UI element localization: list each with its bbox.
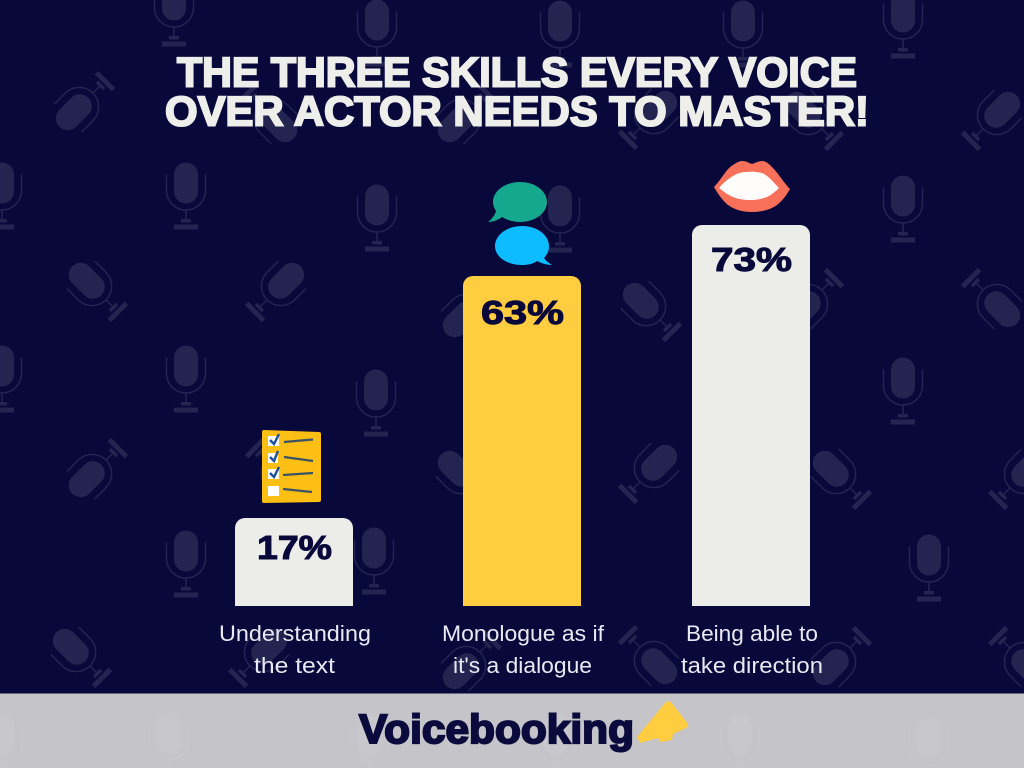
label: being able to take direction: Being able to [686, 621, 818, 646]
label: being able to take direction [681, 621, 823, 678]
value 17%: 17% [257, 529, 332, 566]
bar: understanding the text 17% [235, 518, 353, 606]
bar: monologue as if it's a dialogue 63% [463, 276, 581, 606]
label: understanding the text: Understanding [219, 621, 371, 646]
icon: speech bubbles [488, 182, 552, 265]
icon: lips [714, 161, 790, 212]
label: monologue as if it's a dialogue: it's a dialogue [453, 653, 592, 678]
label: monologue as if it's a dialogue [442, 621, 605, 678]
footer band [0, 694, 1024, 768]
logo: voicebooking wordmark: Voicebooking [359, 706, 634, 752]
label: monologue as if it's a dialogue: Monologue as if [442, 621, 605, 646]
label: understanding the text [219, 621, 371, 678]
value 73%: 73% [711, 241, 792, 278]
label: understanding the text: the text [254, 653, 335, 678]
title: THE THREE SKILLS EVERY VOICE [177, 48, 857, 96]
value 63%: 63% [481, 294, 564, 331]
logo: megaphone [637, 701, 688, 743]
title: OVER ACTOR NEEDS TO MASTER! [165, 88, 869, 134]
bar: being able to take direction 73% [692, 225, 810, 606]
title [165, 48, 869, 134]
label: being able to take direction: take direction [681, 653, 823, 678]
icon: checklist [262, 430, 321, 503]
